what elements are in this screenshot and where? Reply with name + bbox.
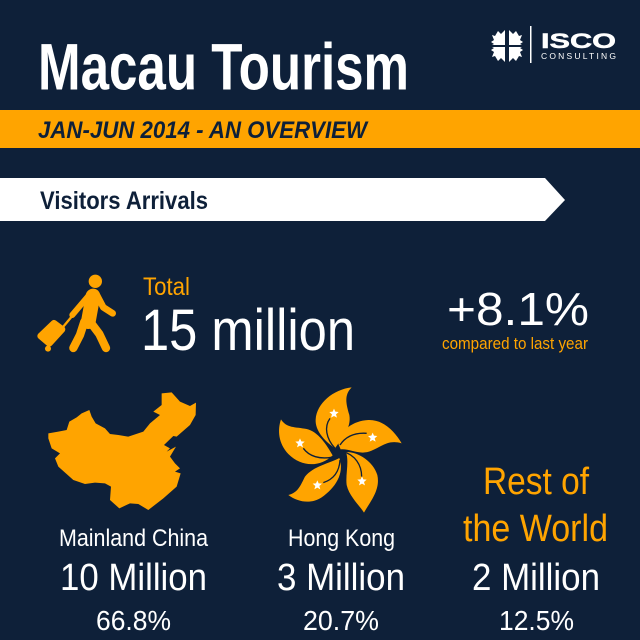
column: Mainland China: 66.8%: [96, 605, 171, 636]
petal: bottom left: [288, 458, 341, 502]
section heading: Visitors Arrivals: Visitors Arrivals: [40, 187, 208, 215]
petal: right: [338, 420, 402, 453]
column: Mainland China: Mainland China: [59, 525, 209, 552]
logo: ISCO Consulting: [491, 26, 616, 63]
column: Mainland China: 10 Million: [60, 557, 207, 599]
banner: subtitle: JAN-JUN 2014 - AN OVERVIEW: [38, 117, 369, 144]
column: Rest of the World: the World: [463, 508, 608, 550]
growth figure: +8.1%: [447, 283, 589, 335]
logo: ISCO Consulting: CONSULTING: [541, 51, 616, 61]
column: Rest of the World: Rest of: [483, 461, 589, 503]
column: Hong Kong: [277, 525, 405, 636]
logo: ISCO Consulting: ISCO: [541, 30, 616, 53]
column: Rest of the World: 2 Million: [472, 557, 600, 599]
column: Hong Kong: Hong Kong: [288, 525, 395, 552]
column: Rest of the World: 12.5%: [499, 605, 574, 636]
petal: bottom right: [343, 452, 378, 513]
icon: map of China: [48, 392, 196, 510]
petal: left: [279, 419, 333, 464]
icon: traveller with suitcase: [41, 275, 113, 352]
column: Rest of the World: [463, 461, 608, 636]
total visitors figure: 15 million: [141, 298, 355, 363]
icon: Hong Kong bauhinia flower: [279, 387, 402, 513]
title: Macau Tourism: [38, 30, 409, 104]
column: Hong Kong: 3 Million: [277, 557, 405, 599]
section heading: Visitors Arrivals: [0, 178, 565, 221]
total label: Total: [143, 273, 190, 301]
banner: subtitle: [0, 110, 640, 148]
petal: top: [316, 387, 352, 448]
growth caption: compared to last year: [442, 334, 588, 353]
column: Hong Kong: 20.7%: [303, 605, 379, 636]
column: Mainland China: [59, 525, 209, 636]
